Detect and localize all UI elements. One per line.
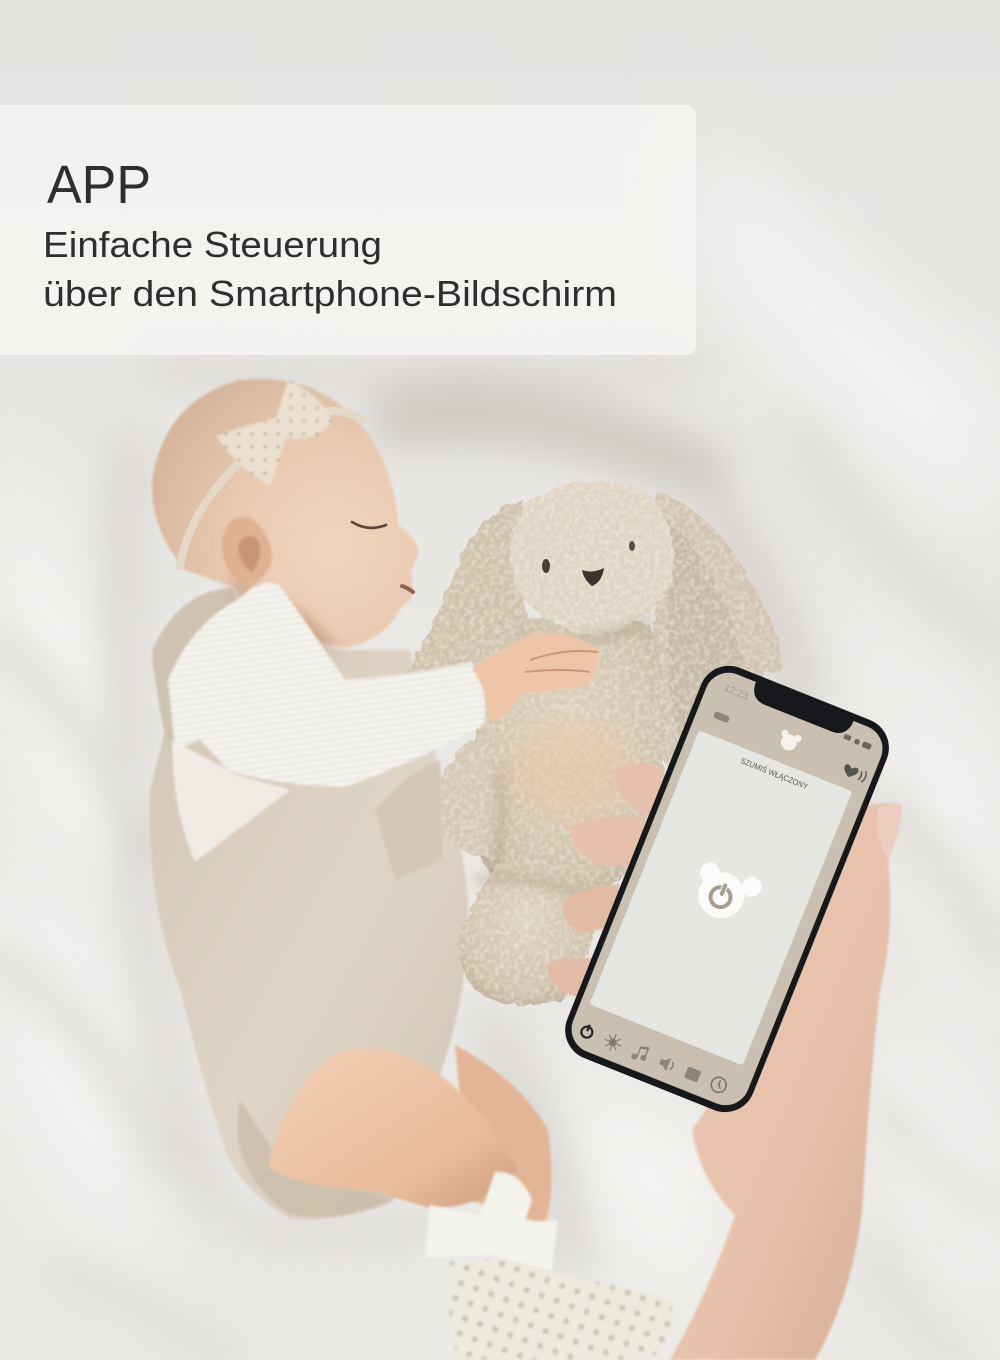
bunny: left ear <box>405 500 540 690</box>
white panel <box>589 730 852 1065</box>
subtitle line 2: über den Smartphone-Bildschirm <box>43 273 617 314</box>
baby: upper body <box>152 379 600 880</box>
plush bunny <box>405 481 785 1006</box>
app heading: SZUMIŚ WŁĄCZONY <box>739 756 810 792</box>
status icons <box>843 734 872 750</box>
bottom navigation icons <box>578 1022 729 1096</box>
small bear logo <box>776 729 803 754</box>
bunny: right ear <box>620 490 785 770</box>
music icon <box>630 1042 651 1064</box>
baby: leg cuff shadow <box>237 1100 395 1217</box>
bunny: glow on tummy <box>508 722 632 818</box>
finger 4 <box>546 957 595 998</box>
bear power button <box>686 858 765 930</box>
finger 2 <box>570 816 645 868</box>
bunny: body <box>470 616 666 900</box>
baby: lace sock <box>449 1260 672 1360</box>
baby: white shirt sleeve <box>168 582 486 787</box>
power icon <box>580 1023 595 1039</box>
phone body <box>556 657 898 1121</box>
hand: back fingers <box>546 764 668 998</box>
baby: white bow sock <box>425 1172 558 1272</box>
battery icon <box>713 711 730 723</box>
baby: headband <box>180 411 362 566</box>
brightness icon <box>601 1031 625 1054</box>
translucent header panel <box>0 105 696 355</box>
moon card icon <box>684 1066 701 1083</box>
baby: romper body <box>150 640 468 1219</box>
heart sound icon <box>841 763 868 783</box>
baby: polka dot bow <box>216 380 332 486</box>
hand: palm, wrist and thumb <box>670 803 902 1360</box>
smartphone <box>556 657 898 1121</box>
bunny: head <box>510 481 674 636</box>
finger 1 <box>614 764 668 818</box>
baby: neck shadow <box>230 580 340 650</box>
subtitle line 1: Einfache Steuerung <box>43 224 382 265</box>
baby: closed eye and mouth <box>352 522 413 592</box>
title: APP <box>47 155 151 215</box>
bunny: eyes and nose <box>542 541 635 586</box>
baby: arm and hand on bunny <box>472 632 600 722</box>
baby: lower body <box>150 588 672 1360</box>
timer icon <box>709 1075 728 1095</box>
baby: fleece bib between baby and bunny <box>375 760 442 880</box>
baby: white shirt under strap <box>172 740 290 862</box>
bunny: right ear inner <box>668 520 745 740</box>
baby: finger lines <box>525 651 598 672</box>
bunny: arm <box>438 740 506 858</box>
baby: thigh <box>268 1049 518 1208</box>
speaker icon <box>658 1055 675 1073</box>
finger 3 <box>562 884 620 934</box>
bunny: fur creases <box>478 620 650 900</box>
baby: romper strap shoulder <box>152 588 250 770</box>
phone notch <box>749 681 854 738</box>
baby: head <box>152 379 418 648</box>
clock: 12:23 <box>722 683 750 703</box>
phone screen <box>564 666 890 1112</box>
baby: ear <box>222 517 272 584</box>
bunny: lower leg <box>458 858 592 1006</box>
baby: lower leg behind <box>455 1045 551 1225</box>
hand: thumbnail <box>877 805 902 858</box>
baby: ear inner <box>238 536 260 572</box>
